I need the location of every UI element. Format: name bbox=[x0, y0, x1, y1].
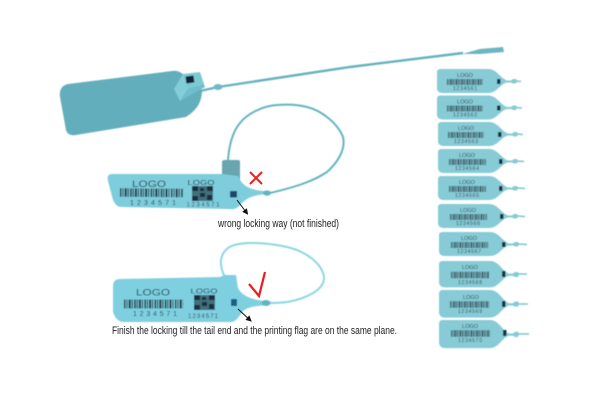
tag 1234569: 1234569 bbox=[458, 309, 482, 315]
tag 1234561: 1234561 bbox=[453, 86, 477, 92]
wrong locking example bbox=[108, 105, 344, 209]
tag 1234565: LOGO bbox=[459, 180, 476, 186]
correct locking example bbox=[113, 243, 324, 322]
tag 1234568: LOGO bbox=[462, 265, 479, 271]
tag 1234566: 1234566 bbox=[456, 221, 480, 227]
tag 1234567 bbox=[439, 232, 527, 256]
tag 1234570 bbox=[439, 320, 529, 348]
QR code bbox=[192, 186, 213, 201]
strap loop bbox=[221, 243, 324, 303]
tag 1234567: LOGO bbox=[461, 236, 478, 242]
tag 1234569: LOGO bbox=[463, 295, 480, 301]
tag 1234563: LOGO bbox=[458, 126, 475, 132]
tag 1234562 bbox=[437, 96, 522, 120]
tag 1234568 bbox=[439, 261, 527, 287]
tag 1234570: LOGO bbox=[462, 324, 479, 330]
number left: 1234571 bbox=[130, 200, 176, 207]
open seal: large tag with strap bbox=[60, 47, 504, 135]
tag 1234562: 1234562 bbox=[453, 112, 477, 118]
arrow to wrong locking bbox=[237, 200, 248, 214]
arrow to correct locking bbox=[238, 309, 251, 321]
tag 1234565: 1234565 bbox=[455, 193, 479, 199]
barcode left bbox=[120, 188, 183, 197]
tag 1234570: 1234570 bbox=[458, 338, 482, 344]
tag 1234561 bbox=[437, 69, 521, 93]
tag body bbox=[60, 71, 202, 135]
strap tail bbox=[200, 53, 463, 91]
QR code bbox=[194, 295, 215, 310]
tag 1234567: 1234567 bbox=[457, 249, 481, 255]
tag 1234564: LOGO bbox=[459, 153, 476, 159]
barcode left bbox=[124, 300, 183, 308]
lock box bbox=[174, 72, 205, 101]
flag body bbox=[113, 275, 268, 322]
number left: 1234571 bbox=[133, 311, 177, 318]
tag 1234568: 1234568 bbox=[458, 280, 482, 286]
tag 1234562: LOGO bbox=[457, 100, 474, 106]
strap loop bbox=[228, 105, 344, 193]
caption: correct locking: Finish the locking till the tail end and the printing flag are on the same plane. bbox=[112, 325, 397, 337]
logo left: LOGO bbox=[136, 288, 170, 298]
tag 1234564 bbox=[438, 149, 524, 173]
caption: wrong locking: wrong locking way (not finished) bbox=[217, 218, 339, 230]
red check mark bbox=[249, 272, 265, 296]
tag 1234569 bbox=[439, 290, 528, 318]
column of ten numbered tags bbox=[437, 69, 529, 348]
tag 1234561: LOGO bbox=[457, 73, 474, 79]
tag 1234566: LOGO bbox=[460, 208, 477, 214]
tag 1234566 bbox=[438, 204, 525, 228]
logo right: LOGO bbox=[188, 178, 215, 187]
tag 1234565 bbox=[438, 176, 525, 200]
lock hole bbox=[185, 75, 194, 84]
flag body bbox=[108, 174, 268, 209]
lock slot bbox=[230, 191, 237, 198]
number right: 1234571 bbox=[186, 202, 220, 208]
lock slot bbox=[231, 299, 237, 306]
number right: 1234571 bbox=[188, 314, 219, 320]
logo right: LOGO bbox=[190, 286, 218, 296]
lock collar bbox=[222, 160, 240, 180]
red cross mark bbox=[250, 172, 262, 184]
tag 1234563 bbox=[438, 122, 523, 146]
tag 1234563: 1234563 bbox=[454, 139, 478, 145]
tag 1234564: 1234564 bbox=[455, 166, 479, 172]
logo left: LOGO bbox=[132, 179, 166, 190]
